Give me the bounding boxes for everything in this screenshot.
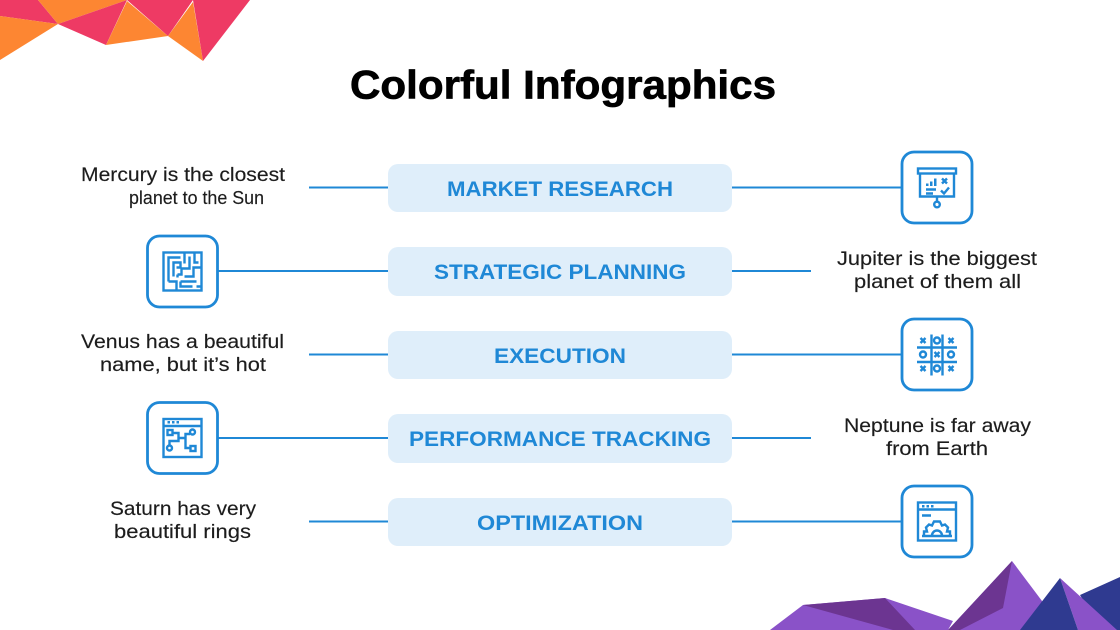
description: Jupiter bbox=[837, 248, 1038, 293]
connector bbox=[218, 270, 811, 272]
description: Jupiter: Jupiter is the biggest bbox=[837, 248, 1038, 270]
description: Neptune: Neptune is far away bbox=[844, 415, 1031, 437]
description: Saturn: beautiful rings bbox=[114, 521, 251, 543]
pill: strategic planning: STRATEGIC PLANNING bbox=[434, 261, 686, 284]
pill: market research: MARKET RESEARCH bbox=[447, 178, 673, 201]
pill: optimization: OPTIMIZATION bbox=[477, 512, 643, 535]
icon: maze bbox=[148, 236, 218, 307]
description: Neptune bbox=[844, 415, 1031, 460]
pill: execution bbox=[388, 331, 732, 379]
description: Mercury bbox=[81, 164, 286, 208]
pill: performance tracking: PERFORMANCE TRACKING bbox=[409, 428, 711, 451]
row 1: market research bbox=[81, 152, 972, 223]
icon: window flowchart bbox=[148, 402, 218, 474]
pill: market research bbox=[388, 164, 732, 212]
description: Saturn: Saturn has very bbox=[110, 498, 256, 520]
decoration: top-left polygons bbox=[0, 0, 250, 61]
description: Venus: Venus has a beautiful bbox=[81, 331, 284, 353]
decoration: bottom-right polygons bbox=[770, 561, 1120, 630]
connector bbox=[309, 186, 902, 188]
connector bbox=[309, 520, 902, 522]
connector bbox=[218, 437, 811, 439]
row 5: optimization bbox=[110, 486, 972, 557]
row 4: performance tracking bbox=[148, 402, 1031, 474]
description: Saturn bbox=[110, 498, 256, 543]
pill: performance tracking bbox=[388, 414, 732, 463]
description: Venus bbox=[81, 331, 284, 376]
description: Neptune: from Earth bbox=[886, 438, 988, 460]
row 2: strategic planning bbox=[148, 236, 1038, 307]
pill: execution: EXECUTION bbox=[494, 345, 626, 368]
description: Mercury: planet to the Sun bbox=[129, 188, 264, 208]
title: Colorful Infographics bbox=[350, 64, 776, 108]
pill: optimization bbox=[388, 498, 732, 546]
icon: tic tac toe bbox=[902, 319, 972, 390]
description: Jupiter: planet of them all bbox=[854, 271, 1021, 293]
row 3: execution bbox=[81, 319, 972, 390]
pill: strategic planning bbox=[388, 247, 732, 296]
connector bbox=[309, 354, 902, 356]
icon: window gear bbox=[902, 486, 972, 557]
description: Venus: name, but it’s hot bbox=[100, 354, 267, 376]
icon: presentation board bbox=[902, 152, 972, 223]
description: Mercury: Mercury is the closest bbox=[81, 164, 286, 186]
